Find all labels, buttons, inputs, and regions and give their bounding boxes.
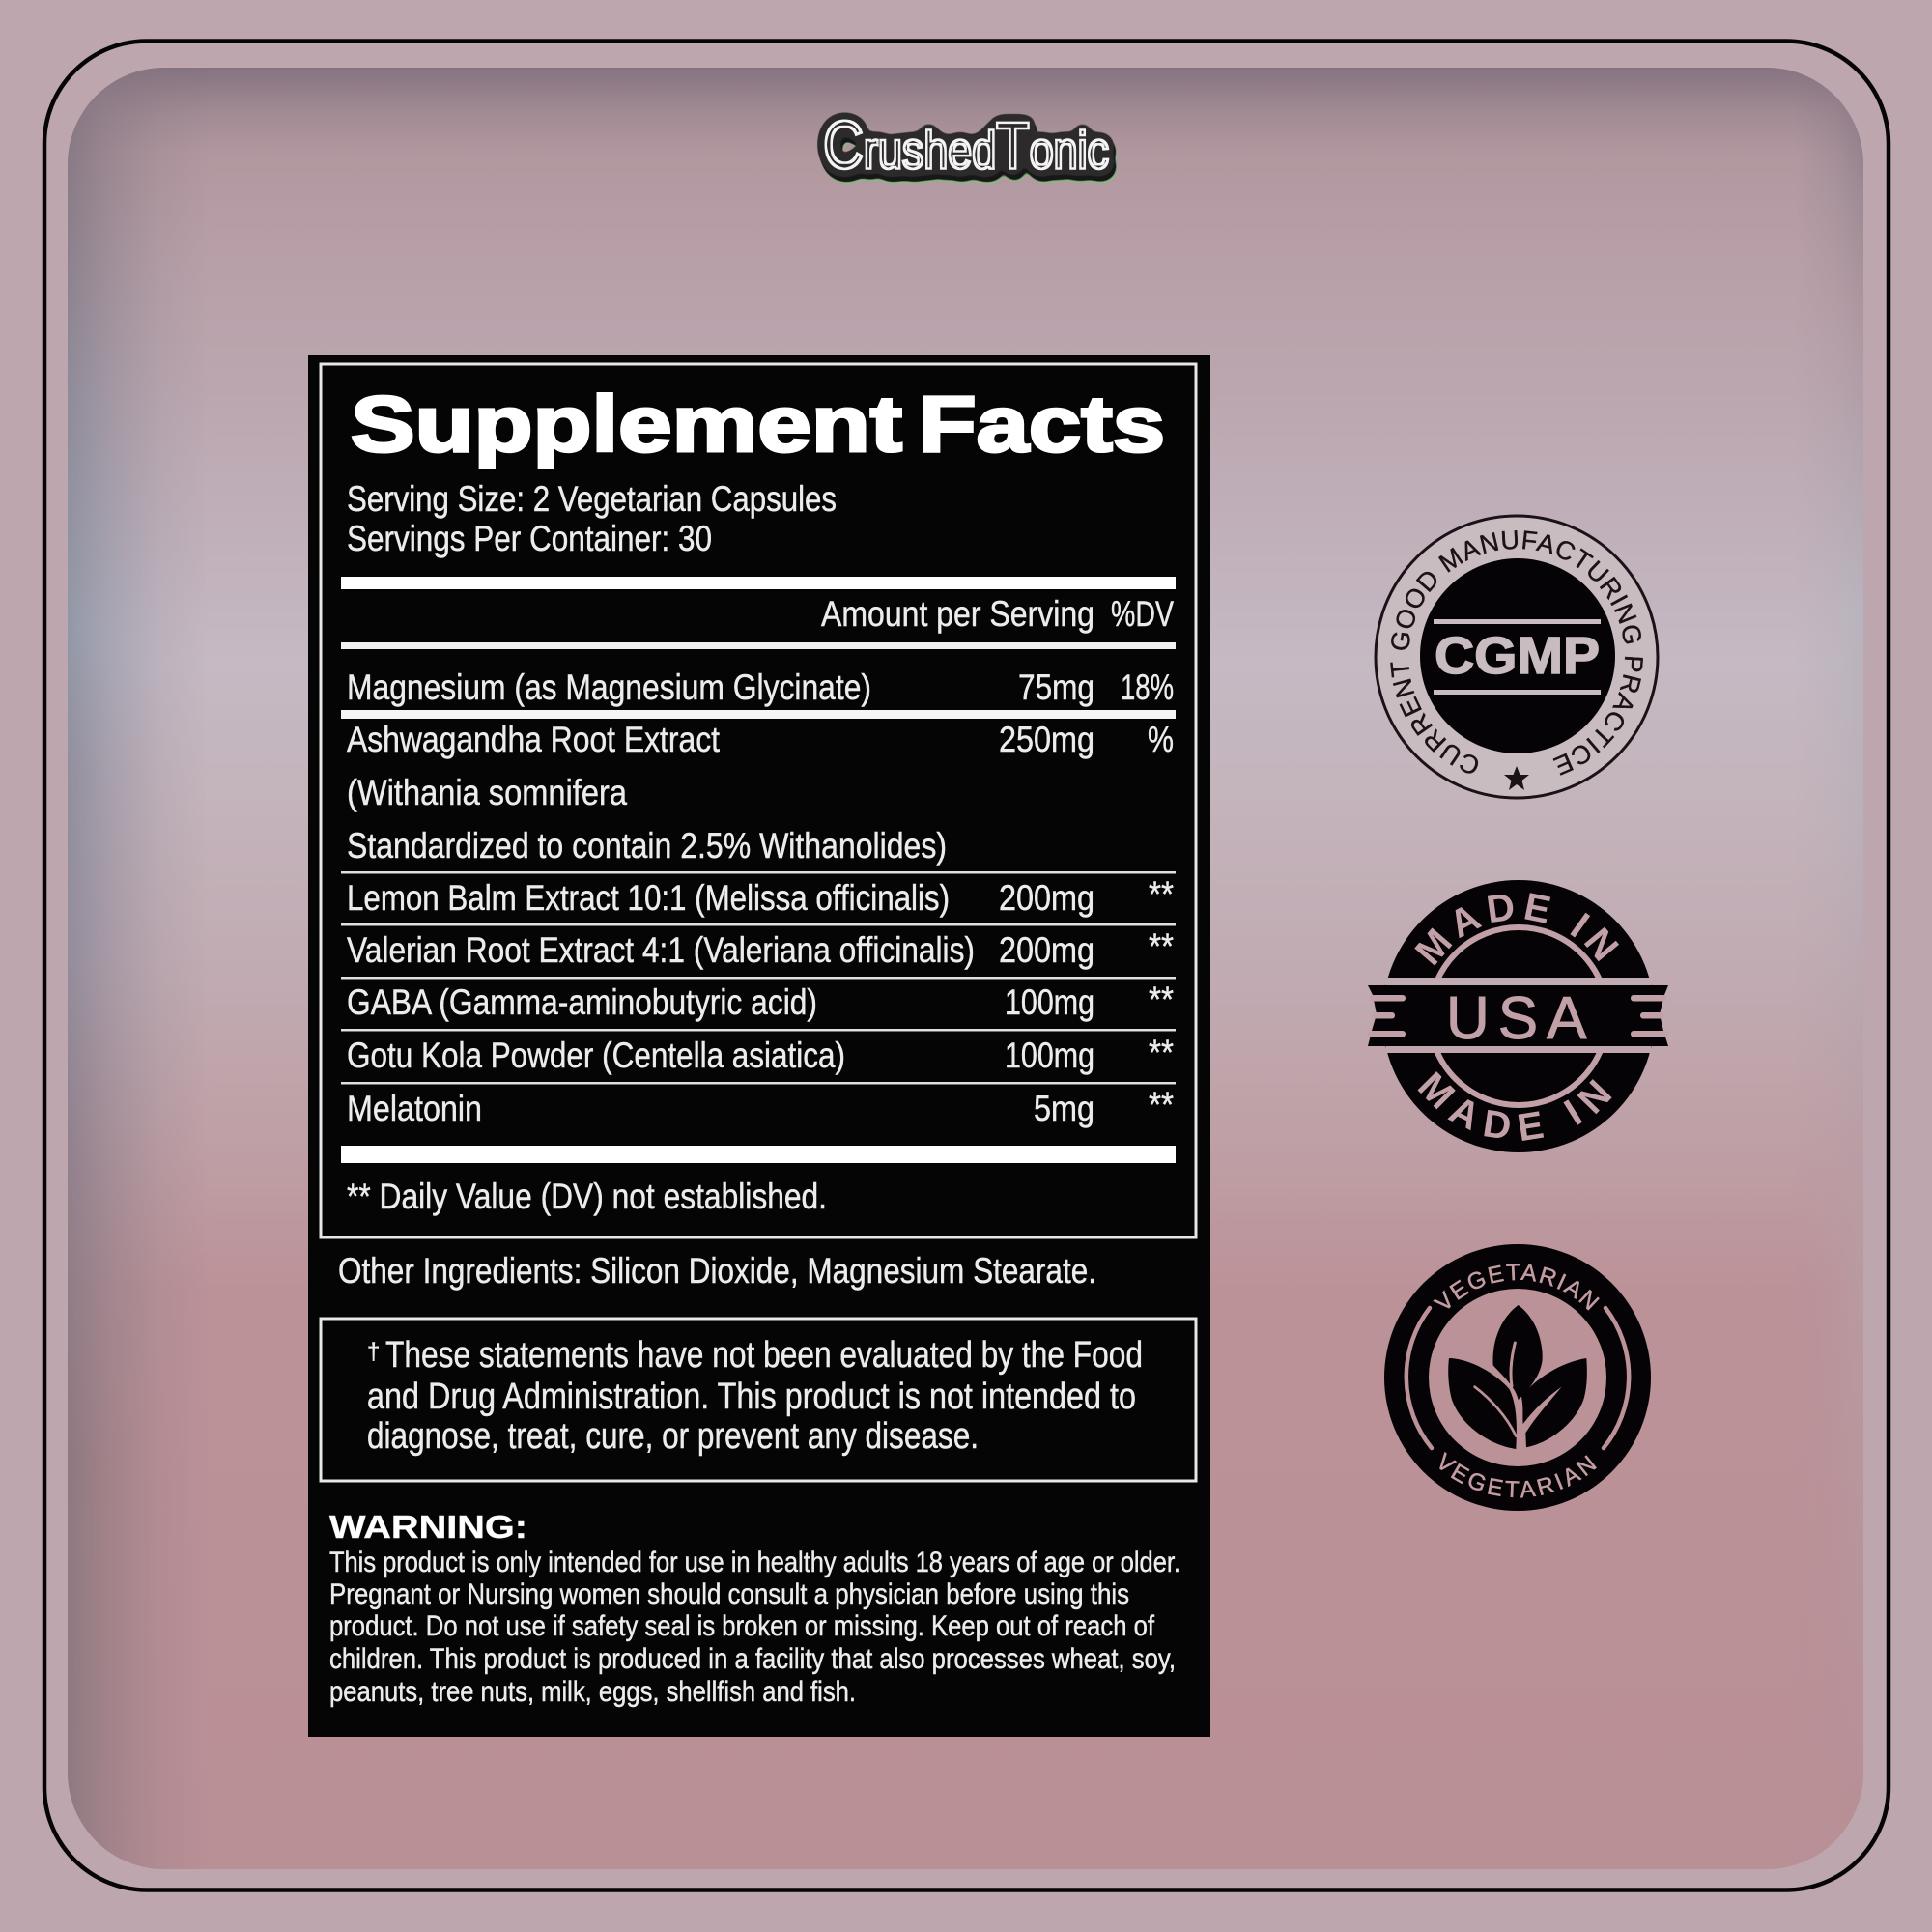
panel: supplement facts label	[308, 355, 1210, 1737]
row: lemon balm: Lemon Balm Extract 10:1 (Melissa officinalis)	[347, 878, 950, 918]
row: GABA	[347, 980, 1174, 1022]
facts box border	[321, 364, 1196, 1237]
row: melatonin: Melatonin	[347, 1089, 482, 1128]
daily value note: ** Daily Value (DV) not established.	[347, 1177, 827, 1216]
heading: Supplement Facts: Supplement	[351, 381, 902, 469]
badge: Made in USA	[1368, 880, 1668, 1152]
FDA disclaimer box: †	[367, 1339, 380, 1365]
row: ashwagandha: Standardized to contain 2.5% Withanolides)	[347, 826, 947, 866]
row: ashwagandha	[347, 720, 1174, 866]
badge: Made in USA: MADE IN	[1418, 1071, 1612, 1141]
column headings: Amount per Serving	[821, 594, 1094, 634]
FDA disclaimer box: diagnose, treat, cure, or prevent any disease.	[367, 1416, 979, 1457]
column headings: %DV	[1111, 594, 1174, 634]
icon: three leaves	[1448, 1305, 1587, 1449]
row: gotu kola	[347, 1033, 1174, 1075]
warning text: product. Do not use if safety seal is broken or missing. Keep out of reach of	[329, 1610, 1155, 1642]
row: ashwagandha: Ashwagandha Root Extract	[347, 720, 721, 759]
badge: Made in USA: MADE IN	[1414, 893, 1619, 966]
row: valerian: **	[1149, 926, 1174, 966]
row: magnesium: 18%	[1121, 668, 1174, 707]
logo: Crushed Tonic: CrushedTonic	[823, 107, 1109, 183]
row: magnesium: Magnesium (as Magnesium Glycinate)	[347, 668, 871, 707]
row: GABA: GABA (Gamma-aminobutyric acid)	[347, 982, 817, 1022]
FDA disclaimer box: These statements have not been evaluated by the Food	[385, 1335, 1143, 1376]
badge: Vegetarian: VEGETARIAN	[1433, 1264, 1600, 1311]
serving information: Servings Per Container: 30	[347, 519, 712, 558]
FDA disclaimer box: and Drug Administration. This product is not intended to	[367, 1377, 1136, 1417]
row: ashwagandha: %	[1148, 720, 1174, 759]
serving information: Serving Size: 2 Vegetarian Capsules	[347, 479, 837, 519]
row: melatonin	[347, 1085, 1174, 1128]
row: GABA: 100mg	[1005, 982, 1094, 1022]
row: gotu kola: 100mg	[1005, 1036, 1094, 1075]
warning text: children. This product is produced in a facility that also processes wheat, soy,	[329, 1643, 1176, 1675]
heading: Supplement Facts	[351, 381, 1165, 469]
badge: Vegetarian	[1384, 1244, 1651, 1511]
warning text: peanuts, tree nuts, milk, eggs, shellfish and fish.	[329, 1676, 856, 1708]
row: lemon balm: **	[1149, 874, 1174, 914]
warning text	[329, 1509, 1180, 1708]
badge: Made in USA: USA	[1446, 985, 1595, 1052]
badge: CGMP: CGMP	[1435, 627, 1600, 685]
warning text: Pregnant or Nursing women should consult a physician before using this	[329, 1578, 1129, 1610]
badge: CGMP: CURRENT GOOD MANUFACTURING PRACTICE	[1390, 530, 1643, 776]
row: lemon balm: 200mg	[999, 878, 1094, 918]
row: melatonin: **	[1149, 1085, 1174, 1124]
thick rule top	[341, 577, 1176, 589]
FDA disclaimer box	[321, 1319, 1196, 1481]
row: GABA: **	[1149, 980, 1174, 1019]
other ingredients: Other Ingredients: Silicon Dioxide, Magnesium Stearate.	[338, 1251, 1096, 1291]
serving information	[347, 479, 837, 558]
row: ashwagandha: 250mg	[999, 720, 1094, 759]
row: magnesium: 75mg	[1018, 668, 1094, 707]
badge: Vegetarian: VEGETARIAN	[1439, 1452, 1597, 1498]
row: gotu kola: Gotu Kola Powder (Centella asiatica)	[347, 1036, 845, 1075]
warning text: This product is only intended for use in healthy adults 18 years of age or older.	[329, 1547, 1180, 1578]
row: gotu kola: **	[1149, 1033, 1174, 1072]
row: valerian: 200mg	[999, 930, 1094, 970]
heading: Supplement Facts: Facts	[919, 381, 1165, 469]
row: melatonin: 5mg	[1034, 1089, 1094, 1128]
warning text: WARNING:	[329, 1509, 527, 1545]
row: valerian: Valerian Root Extract 4:1 (Valeriana officinalis)	[347, 930, 975, 970]
row: ashwagandha: (Withania somnifera	[347, 773, 627, 812]
